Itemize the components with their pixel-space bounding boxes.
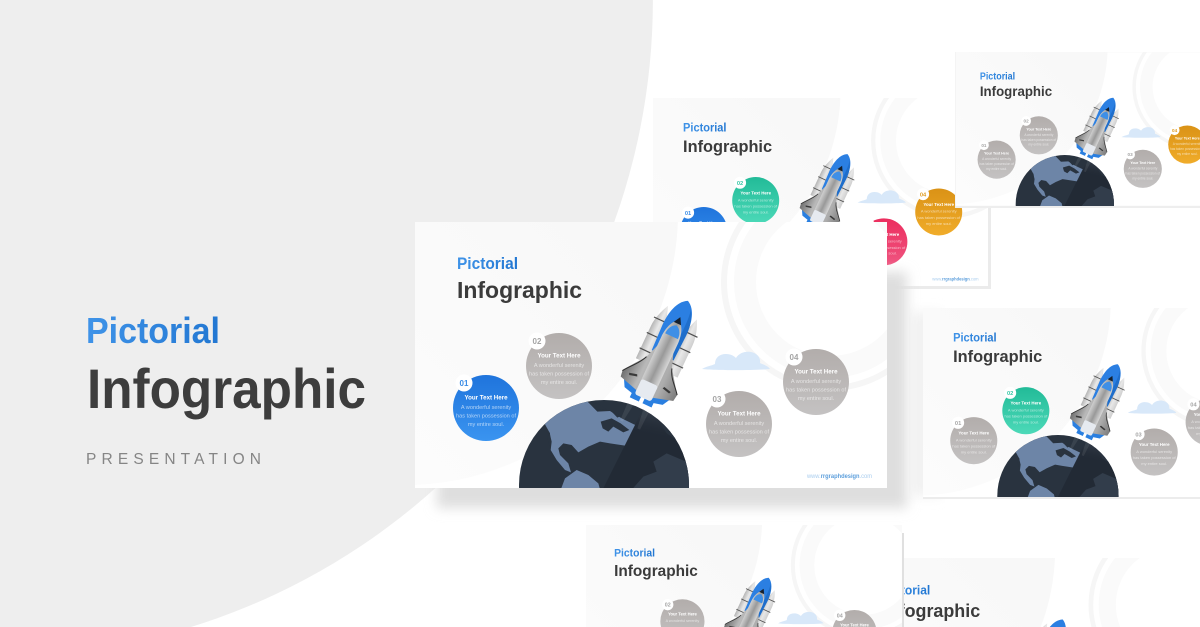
slide preview: middle right: Your Text Here: [1139, 442, 1170, 447]
slide preview: top centre: Infographic: [683, 137, 772, 156]
slide title: Pictorial: Pictorial: [457, 254, 518, 273]
slide preview: middle right: Your Text Here: [958, 431, 990, 436]
slide preview: top centre: A wonderful serenity: [738, 197, 774, 202]
slide preview: middle right: my entire soul.: [1141, 461, 1167, 466]
slide title: Infographic: Infographic: [457, 277, 582, 303]
slide preview: top centre: 01: [685, 211, 691, 217]
callout 02: my entire soul.: [541, 380, 578, 386]
slide preview: middle right: 03: [1135, 432, 1142, 438]
heading: Infographic: Infographic: [87, 357, 366, 420]
slide preview: top centre: Your Text Here: [740, 190, 772, 195]
slide preview: top right: Your Text Here: [1026, 127, 1051, 131]
footer url: www.rrgraphdesign.com: [806, 473, 872, 480]
slide preview: top centre: my entire soul.: [743, 209, 769, 214]
slide preview: top right: my entire soul.: [986, 167, 1007, 171]
slide preview: top centre: Your Text Here: [923, 202, 955, 207]
slide preview: top right: Infographic: [980, 84, 1053, 99]
large gray circle backdrop: [0, 0, 653, 627]
slide preview: top right: A wonderful serenity: [1128, 166, 1158, 170]
subheading: presentation: PRESENTATION: [86, 451, 261, 468]
callout 03: [706, 390, 772, 457]
slide preview: top centre: has taken possession of: [917, 215, 961, 220]
callout 03: A wonderful serenity: [714, 421, 764, 427]
slide preview: top right: Your Text Here: [1130, 161, 1155, 165]
slide preview: top centre: A wonderful serenity: [921, 209, 957, 214]
callout 02: has taken possession of: [529, 372, 589, 378]
slide preview: middle right: [721, 106, 1200, 556]
slide preview: top centre: Your Text Here: [869, 232, 900, 237]
slide preview: middle right: A wonderful serenity: [1136, 449, 1172, 454]
callout 04: [783, 348, 849, 415]
slide preview: top centre: www.rrgraphdesign.com: [932, 276, 979, 281]
slide preview: top centre: 02: [737, 181, 743, 187]
slide preview: top centre: 04: [920, 192, 927, 198]
slide preview: top centre: has taken possession of: [863, 245, 906, 250]
callout 01: has taken possession of: [456, 414, 516, 420]
slide preview: middle right: Infographic: [953, 347, 1042, 366]
callout 02: [526, 332, 592, 399]
callout 04: has taken possession of: [786, 388, 846, 394]
slide preview: top right: Your Text Here: [1175, 137, 1200, 141]
callout 02: 02: [533, 337, 542, 346]
slide preview: top centre: A wonderful serenity: [686, 227, 722, 232]
callout 01: Your Text Here: [464, 394, 508, 402]
slide preview: middle right: A wonderful serenity: [1008, 407, 1044, 412]
slide preview: bottom centre: A wonderful serenity: [666, 619, 699, 623]
slide preview: bottom centre: Infographic: [614, 563, 698, 580]
callout 03: my entire soul.: [721, 438, 758, 444]
slide preview: top centre: my entire soul.: [691, 239, 717, 244]
slide preview: middle right: Pictorial: [953, 331, 997, 345]
slide preview: top right: 04: [1172, 128, 1178, 133]
slide preview: top right: 02: [1024, 119, 1029, 124]
slide preview: top centre: has taken possession of: [682, 233, 726, 238]
slide preview: bottom centre: Pictorial: [614, 547, 655, 559]
slide preview: top centre: [452, 0, 1024, 346]
slide preview: bottom right, partly hidden: Infographic: [883, 600, 980, 621]
slide preview: top right: has taken possession of: [979, 162, 1014, 166]
slide preview: top right: my entire soul.: [1177, 152, 1198, 156]
slide preview: top right: has taken possession of: [1126, 171, 1160, 175]
slide preview: top right: my entire soul.: [1028, 143, 1049, 147]
main slide shadow: [437, 272, 907, 508]
callout 04: my entire soul.: [798, 396, 835, 402]
slide preview: top centre: Your Text Here: [688, 220, 720, 225]
slide preview: top right: has taken possession of: [1022, 138, 1056, 142]
slide preview: top centre: Pictorial: [683, 120, 726, 134]
callout 03: 03: [713, 395, 722, 404]
slide preview: top right: Pictorial: [980, 71, 1015, 82]
slide preview: middle right: my entire soul.: [961, 449, 987, 454]
callout 01: my entire soul.: [468, 422, 505, 428]
callout 02: Your Text Here: [537, 352, 581, 360]
slide preview: bottom centre: [397, 336, 935, 627]
slide preview: bottom right, partly hidden: [883, 558, 1108, 627]
panel: main slide: [415, 222, 887, 488]
callout 03: has taken possession of: [709, 430, 769, 436]
slide preview: top right: 03: [1128, 152, 1133, 157]
slide preview: top right: 01: [981, 143, 987, 148]
callout 04: Your Text Here: [794, 368, 838, 376]
slide preview: top centre: my entire soul.: [926, 221, 952, 226]
heading: Pictorial: Pictorial: [86, 310, 220, 351]
callout 04: 04: [790, 353, 799, 362]
slide preview: bottom centre: Your Text Here: [668, 612, 697, 617]
slide preview: top centre: 03: [865, 222, 871, 228]
slide preview: middle right: has taken possession of: [1004, 414, 1048, 419]
slide preview: top right: my entire soul.: [1132, 176, 1153, 180]
slide preview: bottom centre: 04: [837, 613, 843, 619]
slide preview: top right: A wonderful serenity: [982, 157, 1012, 161]
callout 04: A wonderful serenity: [791, 379, 841, 385]
icon: earth globe: [519, 395, 697, 570]
callout 01: [453, 374, 519, 441]
main heading block: [86, 310, 366, 468]
slide preview: bottom right, partly hidden: Pictorial: [883, 583, 930, 598]
slide preview: middle right: A wonderful serenity: [956, 437, 992, 442]
slide preview: top right: [792, 0, 1200, 253]
slide preview: middle right: 02: [1007, 391, 1013, 397]
callout 03: Your Text Here: [717, 410, 761, 418]
slide preview: middle right: 04: [1190, 402, 1197, 408]
callout 01: 01: [460, 379, 469, 388]
slide preview: top centre: my entire soul.: [871, 251, 897, 256]
callout 01: A wonderful serenity: [461, 405, 511, 411]
icon: cloud: [702, 352, 770, 370]
icon: space shuttle rocket: [603, 288, 715, 438]
slide preview: middle right: my entire soul.: [1013, 420, 1039, 425]
slide preview: top centre: has taken possession of: [734, 203, 778, 208]
slide preview: top right: A wonderful serenity: [1024, 133, 1054, 137]
slide preview: middle right: Your Text Here: [1010, 401, 1042, 406]
slide preview: top right: Your Text Here: [984, 152, 1009, 156]
slide preview: middle right: has taken possession of: [1133, 455, 1176, 460]
callout 02: A wonderful serenity: [534, 363, 584, 369]
slide preview: top centre: A wonderful serenity: [866, 239, 902, 244]
slide preview: middle right: 01: [955, 421, 961, 427]
slide preview: middle right: has taken possession of: [952, 444, 996, 449]
slide preview: bottom centre: 02: [665, 603, 671, 609]
